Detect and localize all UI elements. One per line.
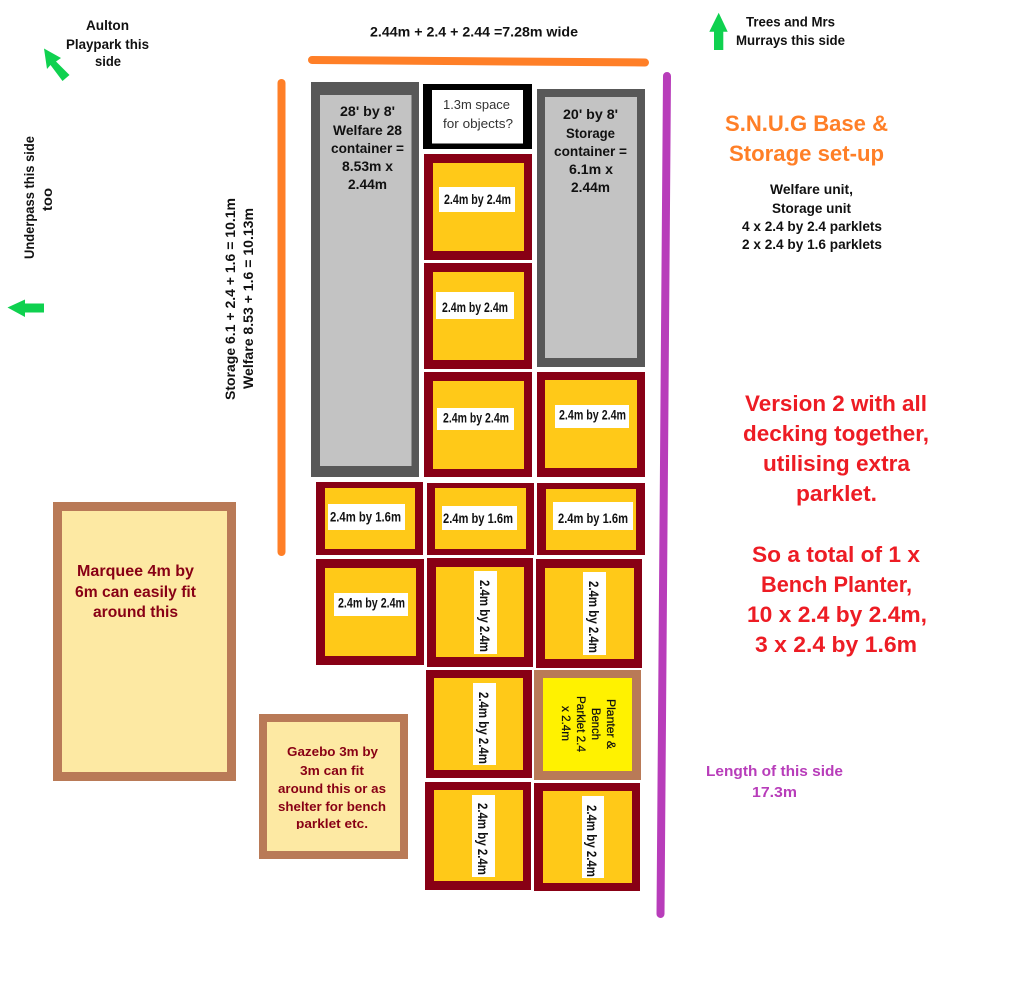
parklet rotated, middle bottom	[425, 782, 531, 890]
version 2 note: So a total of 1 x	[752, 542, 920, 567]
component list: Storage unit	[772, 201, 851, 216]
panel: welfare container: container =	[331, 141, 404, 156]
panel: marquee: around this	[93, 604, 178, 621]
panel: storage container: 2.44m	[571, 180, 610, 195]
note: Aulton Playpark	[66, 18, 149, 69]
planter and bench parklet	[534, 670, 641, 780]
note: Trees and Mrs Murrays: Murrays this side	[736, 33, 845, 48]
parklet rotated, middle bottom: 2.4m by 2.4m	[475, 803, 491, 875]
purple side length line	[660, 76, 667, 914]
parklet rotated, right upper: 2.4m by 2.4m	[586, 581, 602, 653]
panel: welfare container: 2.44m	[348, 177, 387, 192]
length calculations	[223, 198, 256, 400]
version 2 note: 10 x 2.4 by 2.4m,	[747, 602, 927, 627]
panel: gazebo	[259, 714, 408, 859]
panel: marquee: Marquee 4m by	[77, 563, 194, 580]
parklet rotated, middle lower	[426, 670, 532, 778]
panel: gazebo: parklet etc.	[296, 816, 368, 831]
title	[725, 111, 888, 166]
note: Underpass: too	[40, 188, 55, 211]
parklet rotated, right bottom: 2.4m by 2.4m	[584, 805, 600, 877]
planter and bench parklet: x 2.4m	[559, 706, 573, 741]
version 2 note: parklet.	[796, 481, 877, 506]
planter and bench parklet: Parklet 2.4	[574, 696, 588, 752]
note: Aulton Playpark: Playpark this	[66, 37, 149, 52]
panel: storage container: Storage	[566, 126, 615, 141]
parklet 2.4 by 1.6, left: 2.4m by 1.6m	[330, 508, 401, 524]
title: Storage set-up	[729, 141, 884, 166]
panel: marquee	[53, 502, 236, 781]
version 2 note	[743, 391, 929, 657]
parklet 2.4 by 1.6, right: 2.4m by 1.6m	[558, 510, 628, 526]
parklet rotated, right upper	[536, 559, 642, 668]
note: Aulton Playpark: Aulton	[86, 18, 129, 33]
panel: welfare container: 8.53m x	[342, 159, 393, 174]
parklet 2.4 by 2.4, middle row 3: 2.4m by 2.4m	[443, 410, 509, 426]
note: Trees and Mrs Murrays: Trees and Mrs	[746, 14, 835, 30]
parklet 2.4 by 1.6, middle: 2.4m by 1.6m	[443, 510, 513, 526]
parklet 2.4 by 1.6, middle	[427, 483, 534, 555]
parklet rotated, right bottom	[534, 783, 640, 891]
parklet 2.4 by 2.4, right column	[537, 372, 645, 477]
version 2 note: decking together,	[743, 421, 929, 446]
note: Aulton Playpark: side	[95, 54, 121, 69]
version 2 note: utilising extra	[763, 451, 910, 476]
component list: Welfare unit,	[770, 182, 853, 197]
parklet 2.4 by 2.4, middle row 1	[424, 154, 532, 260]
panel: object space: 1.3m space	[443, 97, 510, 112]
parklet 2.4 by 2.4, middle row 2	[424, 263, 532, 369]
parklet rotated, middle upper	[427, 558, 533, 667]
parklet 2.4 by 1.6, right	[537, 483, 645, 555]
orange width line	[312, 60, 645, 62]
arrow: towards trees	[709, 13, 728, 50]
panel: storage container: 6.1m x	[569, 162, 614, 177]
width dimension label: 2.44m + 2.4 + 2.44 =7.28m wide	[370, 24, 579, 40]
parklet 2.4 by 2.4, left column	[316, 559, 424, 665]
parklet rotated, middle upper: 2.4m by 2.4m	[477, 580, 493, 652]
title: S.N.U.G Base &	[725, 111, 888, 136]
panel: object space: for objects?	[443, 116, 513, 131]
side length label: Length of this side	[706, 763, 843, 780]
planter and bench parklet: Bench	[589, 708, 603, 740]
panel: welfare container: 28' by 8'	[340, 104, 395, 119]
version 2 note: Bench Planter,	[761, 572, 912, 597]
side length label	[706, 763, 843, 801]
parklet rotated, middle lower: 2.4m by 2.4m	[476, 692, 492, 764]
note: Underpass: Underpass this side	[22, 136, 37, 259]
component list	[742, 182, 882, 252]
panel: object space	[423, 84, 532, 149]
arrow: towards underpass	[8, 300, 44, 317]
parklet 2.4 by 2.4, right column: 2.4m by 2.4m	[559, 406, 626, 422]
orange length line	[278, 83, 286, 552]
version 2 note: Version 2 with all	[745, 391, 927, 416]
component list: 4 x 2.4 by 2.4 parklets	[742, 219, 882, 234]
panel: welfare container: Welfare 28	[333, 123, 402, 138]
panel: marquee: 6m can easily fit	[75, 584, 196, 601]
version 2 note: 3 x 2.4 by 1.6m	[755, 632, 917, 657]
side length label: 17.3m	[752, 784, 797, 801]
panel: storage container: 20' by 8'	[563, 107, 618, 122]
component list: 2 x 2.4 by 1.6 parklets	[742, 237, 882, 252]
panel: gazebo: shelter for bench	[278, 799, 386, 814]
parklet 2.4 by 2.4, left column: 2.4m by 2.4m	[338, 594, 405, 610]
length calculations: Welfare 8.53 + 1.6 = 10.13m	[241, 208, 256, 389]
note: Underpass	[22, 136, 55, 259]
arrow: towards playpark	[44, 48, 70, 81]
panel: storage container	[537, 89, 645, 367]
panel: storage container: container =	[554, 144, 627, 159]
note: Trees and Mrs Murrays	[736, 14, 845, 48]
panel: gazebo: Gazebo 3m by	[287, 744, 379, 759]
parklet 2.4 by 1.6, left	[316, 482, 423, 555]
panel: gazebo: 3m can fit	[300, 763, 365, 778]
planter and bench parklet: Planter &	[604, 699, 618, 749]
length calculations: Storage 6.1 + 2.4 + 1.6 = 10.1m	[223, 198, 238, 400]
panel: welfare container	[311, 82, 419, 477]
parklet 2.4 by 2.4, middle row 3	[424, 372, 532, 477]
parklet 2.4 by 2.4, middle row 1: 2.4m by 2.4m	[444, 191, 511, 207]
panel: gazebo: around this or as	[278, 781, 386, 796]
parklet 2.4 by 2.4, middle row 2: 2.4m by 2.4m	[442, 299, 508, 315]
